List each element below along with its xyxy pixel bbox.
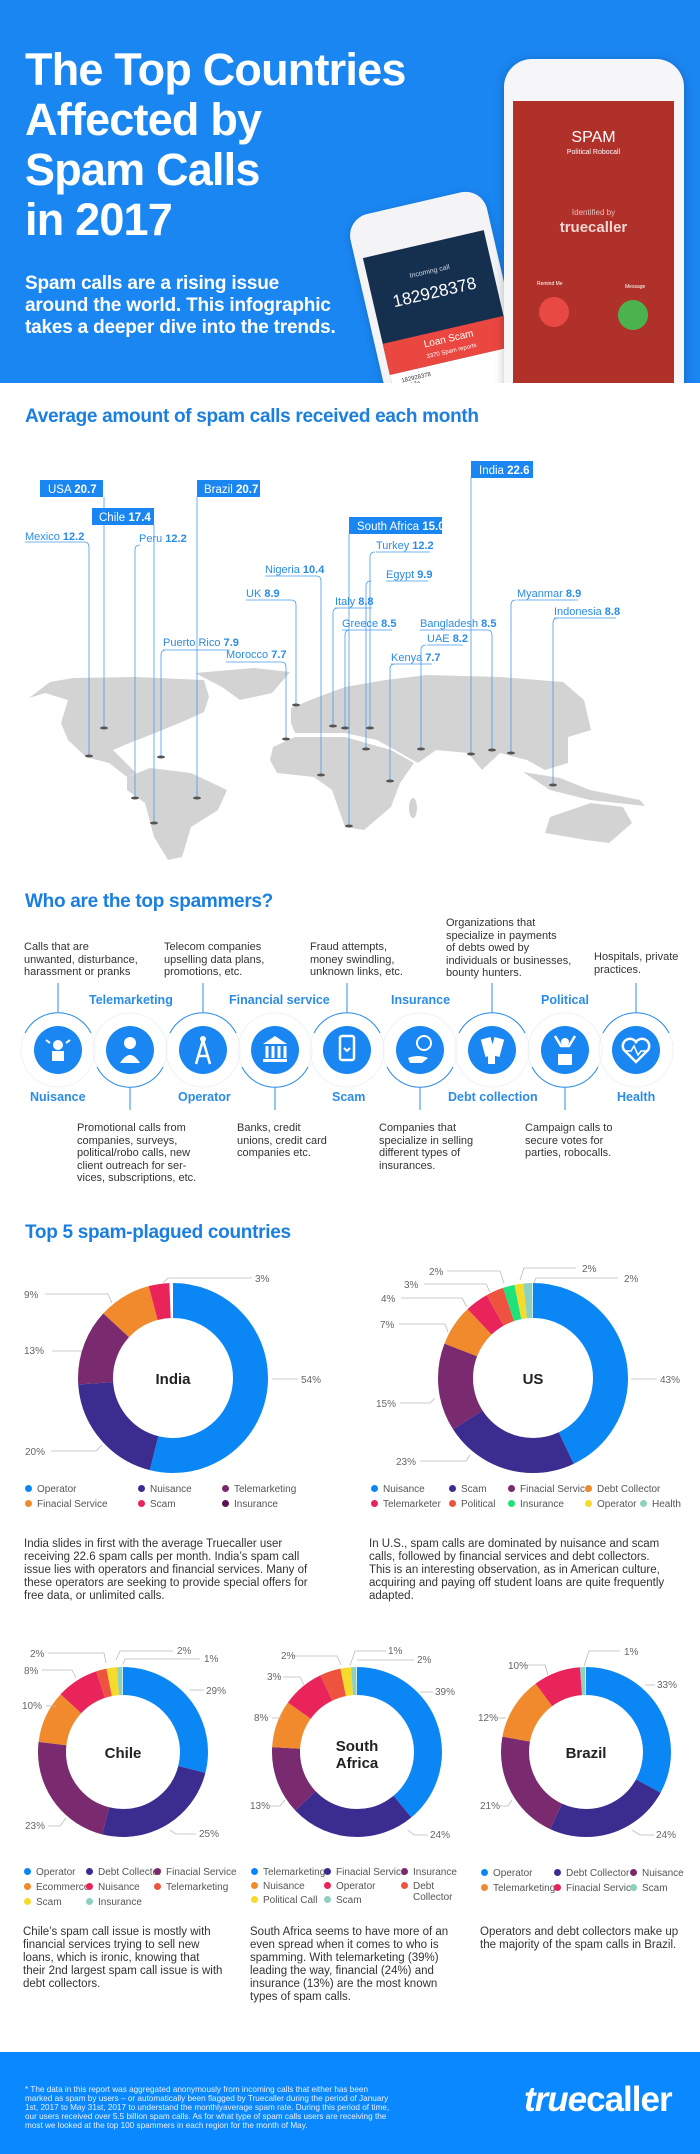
- percentage labels: 23%: [396, 1457, 416, 1468]
- text callouts: Peru 12.2: [139, 533, 187, 545]
- text: Financial service: [229, 993, 330, 1007]
- boxed callouts: Brazil 20.7: [204, 484, 258, 496]
- legend: Chile: [24, 1867, 237, 1908]
- percentage labels: 13%: [250, 1801, 270, 1812]
- text callouts: Mexico 12.2: [25, 531, 84, 543]
- world map with country callouts: [25, 461, 645, 860]
- big phone illustration: SPAM: [571, 129, 616, 146]
- text: vices, subscriptions, etc.: [77, 1172, 196, 1184]
- legend: South Africa: [251, 1867, 457, 1906]
- legend: India: Scam: [150, 1499, 176, 1510]
- percentage labels: 7%: [380, 1320, 395, 1331]
- legend: South Africa: Finacial Service: [336, 1867, 407, 1878]
- text callouts: Bangladesh 8.5: [420, 618, 496, 630]
- legend: South Africa: Telemarketing: [263, 1867, 325, 1878]
- text: upselling data plans,: [164, 954, 264, 966]
- donut center labels: Brazil: [566, 1745, 606, 1762]
- chart: South Africa: [286, 1681, 428, 1823]
- text: Scam: [332, 1090, 365, 1104]
- text callouts: [25, 531, 620, 664]
- title: The Top Countries: [25, 44, 406, 95]
- legend: India: Finacial Service: [37, 1499, 108, 1510]
- legend: India: Nuisance: [150, 1484, 192, 1495]
- text callouts: UK 8.9: [246, 588, 280, 600]
- icon: operator: [179, 1026, 227, 1074]
- percentage labels: 2%: [582, 1264, 597, 1275]
- percentage labels: 54%: [301, 1375, 321, 1386]
- donut charts: [22, 1264, 680, 1841]
- text: unions, credit card: [237, 1134, 327, 1146]
- donut center labels: Chile: [105, 1745, 141, 1762]
- icon: health: [612, 1026, 660, 1074]
- legend: South Africa: Scam: [336, 1895, 362, 1906]
- icon: scam: [323, 1026, 371, 1074]
- text callouts: Kenya 7.7: [391, 652, 441, 664]
- legend: South Africa: Collector: [413, 1892, 452, 1903]
- icon: political: [541, 1026, 589, 1074]
- percentage labels: 2%: [30, 1649, 45, 1660]
- text: individuals or businesses,: [446, 954, 571, 966]
- percentage labels: 2%: [429, 1267, 444, 1278]
- text: Hospitals, private: [594, 951, 678, 963]
- text: specialize in selling: [379, 1134, 473, 1146]
- legend: US: Debt Collector: [597, 1484, 660, 1495]
- category descriptions: [24, 941, 138, 978]
- percentage labels: 1%: [388, 1646, 403, 1657]
- icon: insurance: [396, 1026, 444, 1074]
- South Africa paragraph: South Africa seems to have more of an even spread when it comes to who is spamming. With telemarketing (39%) leading the way, financial (24%) and insurance (13%) are the most known types of spam calls.: [250, 1926, 448, 2003]
- icon: financial service: [251, 1026, 299, 1074]
- big phone illustration: Political Robocall: [567, 149, 620, 156]
- percentage labels: 10%: [22, 1701, 42, 1712]
- heading: average spam calls: Average amount of spam calls received each month: [25, 406, 479, 427]
- faint rings and connectors: [21, 1013, 673, 1087]
- text: Political: [541, 993, 589, 1007]
- legend: US: Political: [461, 1499, 495, 1510]
- big phone illustration: [504, 59, 684, 419]
- chart: US: [456, 1300, 610, 1456]
- text: bounty hunters.: [446, 967, 522, 979]
- legend: India: [25, 1484, 296, 1510]
- legend: US: Operator: [597, 1499, 636, 1510]
- percentage labels: 23%: [25, 1821, 45, 1832]
- text: unknown links, etc.: [310, 966, 403, 978]
- legend: South Africa: Nuisance: [263, 1881, 305, 1892]
- boxed callouts: India 22.6: [479, 465, 530, 477]
- chart: India: [96, 1300, 250, 1456]
- legend: Brazil: Finacial Service: [566, 1883, 637, 1894]
- percentage labels: 4%: [381, 1294, 396, 1305]
- boxed callouts: Chile 17.4: [99, 512, 151, 524]
- boxed callouts: USA 20.7: [48, 484, 97, 496]
- chart: Brazil: [515, 1681, 657, 1823]
- text: Telecom companies: [164, 941, 261, 953]
- text callouts: Egypt 9.9: [386, 569, 432, 581]
- text: of debts owed by: [446, 942, 529, 954]
- big phone illustration: Identified by: [572, 208, 615, 217]
- small phone illustration: 182928378: [391, 274, 478, 311]
- percentage labels: [22, 1264, 680, 1841]
- text: Health: [617, 1090, 655, 1104]
- percentage labels: 15%: [376, 1399, 396, 1410]
- callout leader lines: [25, 477, 616, 826]
- category labels: Telemarketing: [89, 993, 173, 1007]
- percentage labels: 3%: [255, 1274, 270, 1285]
- header banner: [0, 0, 700, 383]
- small phone illustration: 3370 Spam reports: [426, 343, 477, 360]
- legend: South Africa: Debt: [413, 1881, 434, 1892]
- percentage labels: 2%: [177, 1646, 192, 1657]
- chart: Chile: [52, 1681, 194, 1823]
- legend: Chile: Nuisance: [98, 1882, 140, 1893]
- text: secure votes for: [525, 1134, 603, 1146]
- big phone illustration: truecaller: [560, 219, 627, 236]
- legend: India: Operator: [37, 1484, 76, 1495]
- legend: Chile: Telemarketing: [166, 1882, 228, 1893]
- legend: Chile: Debt Collector: [98, 1867, 161, 1878]
- Chile paragraph: Chile’s spam call issue is mostly with financial services trying to sell new loans, which is ironic, knowing that their 2nd largest spam call issue is with debt collectors.: [23, 1926, 222, 1990]
- text: Fraud attempts,: [310, 941, 387, 953]
- subtitle: takes a deeper dive into the trends.: [25, 317, 336, 338]
- legend: US: Finacial Service: [520, 1484, 591, 1495]
- legend: US: Insurance: [520, 1499, 564, 1510]
- percentage labels: 8%: [254, 1713, 269, 1724]
- subtitle: Spam calls are a rising issue: [25, 273, 279, 294]
- text: political/robo calls, new: [77, 1147, 190, 1159]
- percentage labels: 2%: [624, 1274, 639, 1285]
- text: Companies that: [379, 1122, 456, 1134]
- spammer categories diagram: [20, 983, 674, 1110]
- text callouts: Indonesia 8.8: [554, 606, 620, 618]
- percentage labels: 33%: [657, 1680, 677, 1691]
- legend: Chile: Ecommerce: [36, 1882, 89, 1893]
- percentage labels: 13%: [24, 1346, 44, 1357]
- Brazil paragraph: Operators and debt collectors make up the majority of the spam calls in Brazil.: [480, 1926, 678, 1951]
- subtitle: around the world. This infographic: [25, 295, 331, 316]
- percentage leader lines: [42, 1268, 657, 1835]
- text: companies, surveys,: [77, 1134, 177, 1146]
- percentage labels: 12%: [478, 1713, 498, 1724]
- percentage labels: 20%: [25, 1447, 45, 1458]
- percentage labels: 3%: [267, 1672, 282, 1683]
- icon: telemarketing: [106, 1026, 154, 1074]
- big phone illustration: Message: [625, 284, 645, 290]
- legend: Brazil: Scam: [642, 1883, 668, 1894]
- legend: US: Nuisance: [383, 1484, 425, 1495]
- text callouts: Greece 8.5: [342, 618, 396, 630]
- text: Promotional calls from: [77, 1122, 186, 1134]
- percentage labels: 8%: [24, 1666, 39, 1677]
- legend: Chile: Finacial Service: [166, 1867, 237, 1878]
- text: Organizations that: [446, 917, 535, 929]
- truecaller logo: truecaller: [524, 2080, 672, 2119]
- donut center labels: [105, 1371, 606, 1772]
- text callouts: Puerto Rico 7.9: [163, 637, 239, 649]
- text: Banks, credit: [237, 1122, 301, 1134]
- small phone illustration: Loan Scam: [423, 328, 475, 350]
- percentage labels: 2%: [417, 1655, 432, 1666]
- footer: [0, 2052, 700, 2154]
- subtitle: [25, 273, 336, 338]
- heading: top 5: Top 5 spam-plagued countries: [25, 1222, 291, 1243]
- text: Nuisance: [30, 1090, 86, 1104]
- text: client outreach for ser-: [77, 1160, 186, 1172]
- legend: South Africa: Insurance: [413, 1867, 457, 1878]
- donut center labels: Africa: [336, 1755, 379, 1772]
- legend: India: Insurance: [234, 1499, 278, 1510]
- title: [25, 44, 406, 245]
- text: practices.: [594, 964, 641, 976]
- text callouts: UAE 8.2: [427, 633, 468, 645]
- icon: debt collection: [468, 1026, 516, 1074]
- title: Affected by: [25, 94, 261, 145]
- text: promotions, etc.: [164, 966, 242, 978]
- percentage labels: 10%: [508, 1661, 528, 1672]
- text callouts: Morocco 7.7: [226, 649, 287, 661]
- legend: South Africa: Political Call: [263, 1895, 317, 1906]
- boxed callouts: [40, 461, 533, 534]
- legend: South Africa: Operator: [336, 1881, 375, 1892]
- text: different types of: [379, 1147, 460, 1159]
- category descriptions: Calls that are: [24, 941, 89, 953]
- legend: Brazil: Telemarketing: [493, 1883, 555, 1894]
- title: in 2017: [25, 194, 172, 245]
- text: parties, robocalls.: [525, 1147, 611, 1159]
- US paragraph: In U.S., spam calls are dominated by nuisance and scam calls, followed by financial services and debt collectors. This is an interesting observation, as in American culture, acquiring and paying off student loans are quite frequently adapted.: [369, 1538, 664, 1602]
- text callouts: Turkey 12.2: [376, 540, 434, 552]
- text callouts: Nigeria 10.4: [265, 564, 325, 576]
- percentage labels: 1%: [624, 1647, 639, 1658]
- text callouts: Myanmar 8.9: [517, 588, 581, 600]
- title: Spam Calls: [25, 144, 260, 195]
- text: Campaign calls to: [525, 1122, 612, 1134]
- percentage labels: 39%: [435, 1687, 455, 1698]
- percentage labels: 24%: [430, 1830, 450, 1841]
- donut center labels: India: [155, 1371, 191, 1388]
- text: Insurance: [391, 993, 450, 1007]
- text callouts: Italy 8.8: [335, 596, 374, 608]
- legend: Brazil: Operator: [493, 1868, 532, 1879]
- legend: US: Scam: [461, 1484, 487, 1495]
- percentage labels: 2%: [281, 1651, 296, 1662]
- legend: Brazil: Debt Collector: [566, 1868, 629, 1879]
- heading: top spammers: Who are the top spammers?: [25, 891, 273, 912]
- small phone illustration: [346, 187, 538, 463]
- percentage labels: 24%: [656, 1830, 676, 1841]
- map continents: [29, 668, 645, 860]
- text: insurances.: [379, 1160, 435, 1172]
- icon: nuisance: [34, 1026, 82, 1074]
- legend: Chile: Insurance: [98, 1897, 142, 1908]
- percentage labels: 1%: [204, 1654, 219, 1665]
- legend: Brazil: Nuisance: [642, 1868, 684, 1879]
- legend: India: Telemarketing: [234, 1484, 296, 1495]
- category descriptions: harassment or pranks: [24, 966, 130, 978]
- text: specialize in payments: [446, 930, 557, 942]
- percentage labels: 25%: [199, 1829, 219, 1840]
- percentage labels: 9%: [24, 1290, 39, 1301]
- footnote: * The data in this report was aggregated anonymously from incoming calls that either has been marked as spam by users – or automatically been flagged by Truecaller during the period of January 1st, 2017 to May 31st, 2017 to understand the monthlyaverage spam rate. During this period of time, our users received over 5.5 billion spam calls. As for what type of spam calls users are receiving the most we looked at the top 100 spammers in each region for the month of May.: [25, 2085, 389, 2130]
- text: companies etc.: [237, 1147, 311, 1159]
- percentage labels: 21%: [480, 1801, 500, 1812]
- big phone illustration: Remind Me: [537, 281, 563, 287]
- India paragraph: India slides in first with the average Truecaller user receiving 22.6 spam calls per month. India’s spam call issue lies with operators and financial services. Many of these operators are seeking to provide special offers for free data, or unlimited calls.: [24, 1538, 308, 1602]
- legend: US: Health: [652, 1499, 681, 1510]
- donut center labels: South: [336, 1738, 378, 1755]
- percentage labels: 43%: [660, 1375, 680, 1386]
- donut center labels: US: [523, 1371, 543, 1388]
- category descriptions: unwanted, disturbance,: [24, 954, 138, 966]
- text: money swindling,: [310, 954, 394, 966]
- text: Debt collection: [448, 1090, 538, 1104]
- legend: US: [371, 1484, 681, 1510]
- small phone illustration: Incoming call: [409, 264, 450, 280]
- legend: Chile: Scam: [36, 1897, 62, 1908]
- legend: Brazil: [481, 1868, 684, 1894]
- percentage labels: 3%: [404, 1280, 419, 1291]
- legend: US: Telemarketer: [383, 1499, 441, 1510]
- text: Operator: [178, 1090, 231, 1104]
- boxed callouts: South Africa 15.0: [357, 521, 445, 533]
- location dots: [85, 704, 557, 828]
- legend: Chile: Operator: [36, 1867, 75, 1878]
- percentage labels: 29%: [206, 1686, 226, 1697]
